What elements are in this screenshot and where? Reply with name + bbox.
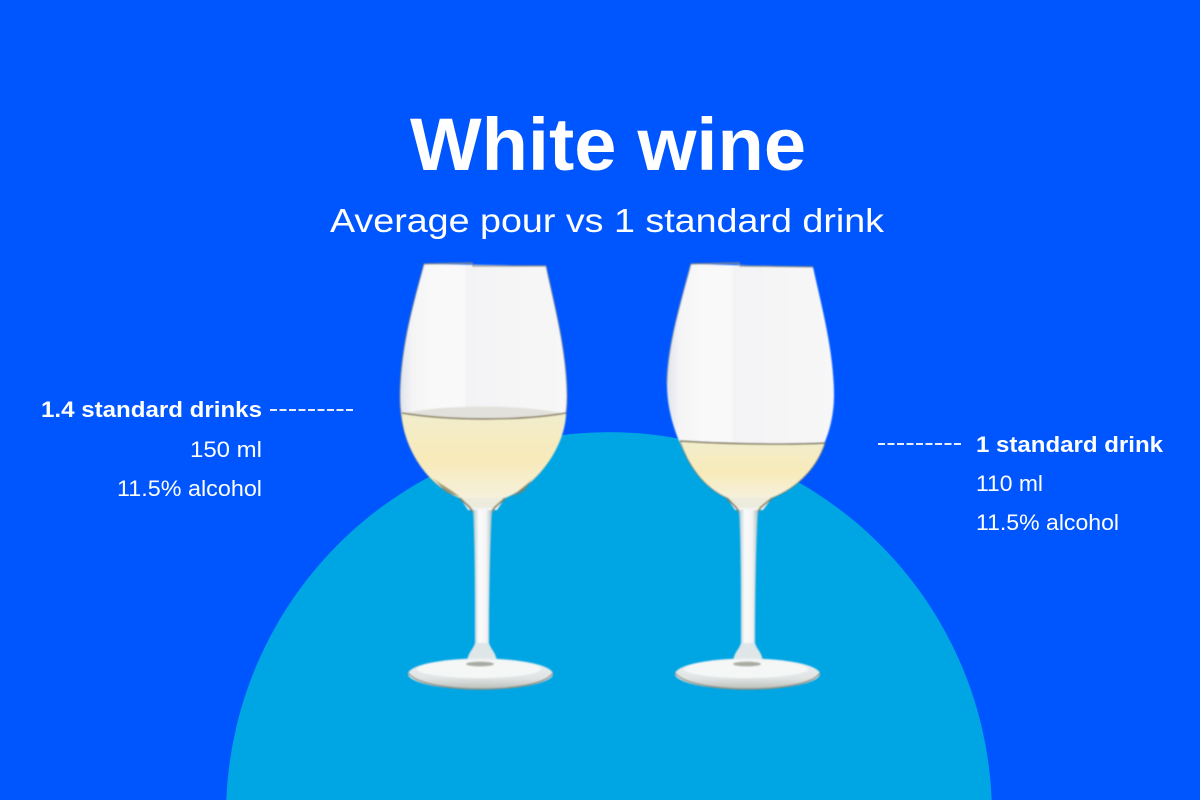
left dashed leader line [270,409,355,411]
title: White wine [410,103,806,186]
subtitle: Average pour vs 1 standard drink [330,202,885,239]
light blue semicircle [226,432,992,800]
right callout text [976,432,1164,535]
right callout text: 110 ml [976,471,1043,496]
right callout text: 11.5% alcohol [976,510,1119,535]
left callout text [41,397,262,501]
right callout text: 1 standard drink [976,432,1164,457]
left glass: average pour [400,263,567,690]
right glass: one standard drink [667,263,834,690]
left callout text: 11.5% alcohol [117,476,262,501]
right dashed leader line [878,443,963,445]
left callout text: 1.4 standard drinks [41,397,262,422]
left callout text: 150 ml [190,437,262,462]
